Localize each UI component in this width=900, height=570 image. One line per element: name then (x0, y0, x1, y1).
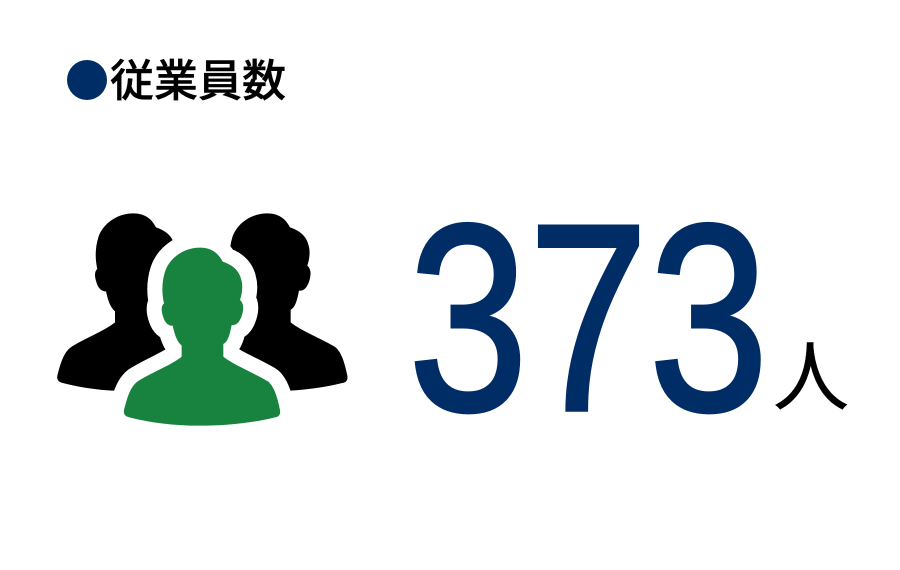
icon: centre person (124, 248, 280, 426)
heading bullet (67, 60, 107, 100)
icon: right person (191, 213, 347, 391)
icon: left person (57, 213, 213, 391)
unit: 人 (773, 336, 849, 421)
heading: 従業員数 (110, 57, 286, 106)
icon: group of people (57, 213, 347, 426)
number: 373: 373 (408, 169, 769, 467)
